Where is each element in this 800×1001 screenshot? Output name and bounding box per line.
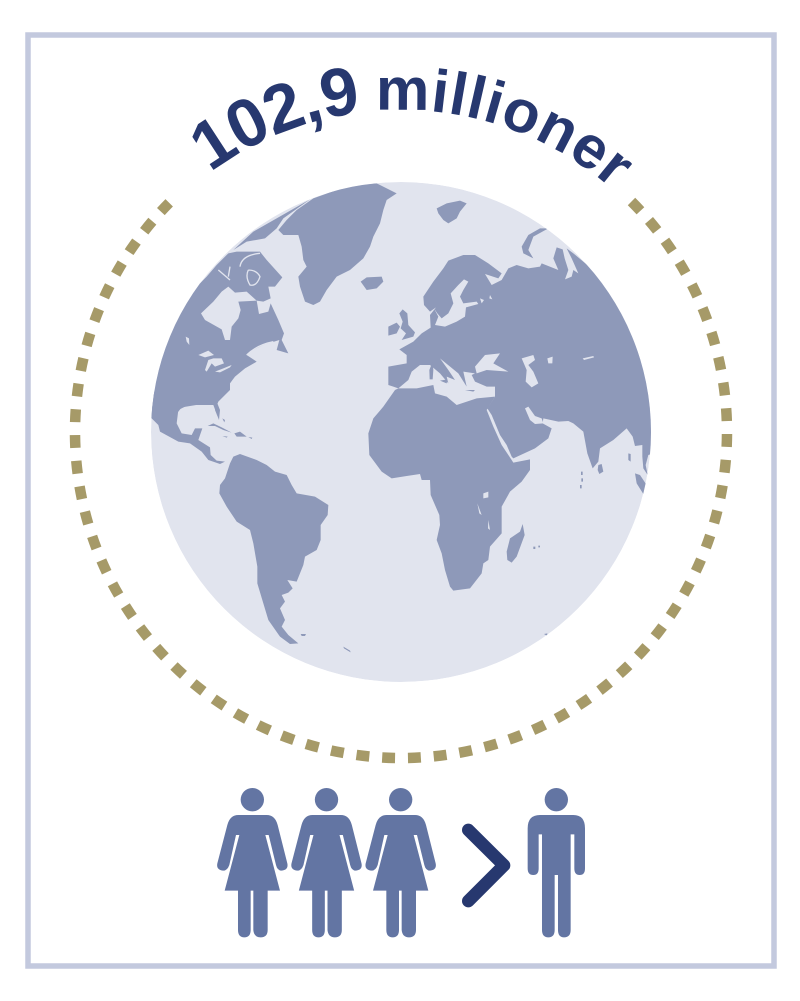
globe map [130,182,677,682]
dotted ring around globe [75,202,727,758]
title: curved headline: 102,9 [192,68,356,170]
title: curved headline: millioner [380,68,632,182]
South America and Africa [219,385,547,652]
icon: greater-than arrow [468,830,504,901]
icon: man [528,788,585,937]
title: curved headline [192,68,632,182]
Mexico, Central America and Caribbean [151,390,252,464]
icon: woman 1 [217,788,288,937]
Eurasia [388,201,677,494]
comparison icons [217,788,585,937]
icon: woman 3 [365,788,436,937]
North America and Greenland [130,183,397,418]
icon: woman 2 [291,788,362,937]
